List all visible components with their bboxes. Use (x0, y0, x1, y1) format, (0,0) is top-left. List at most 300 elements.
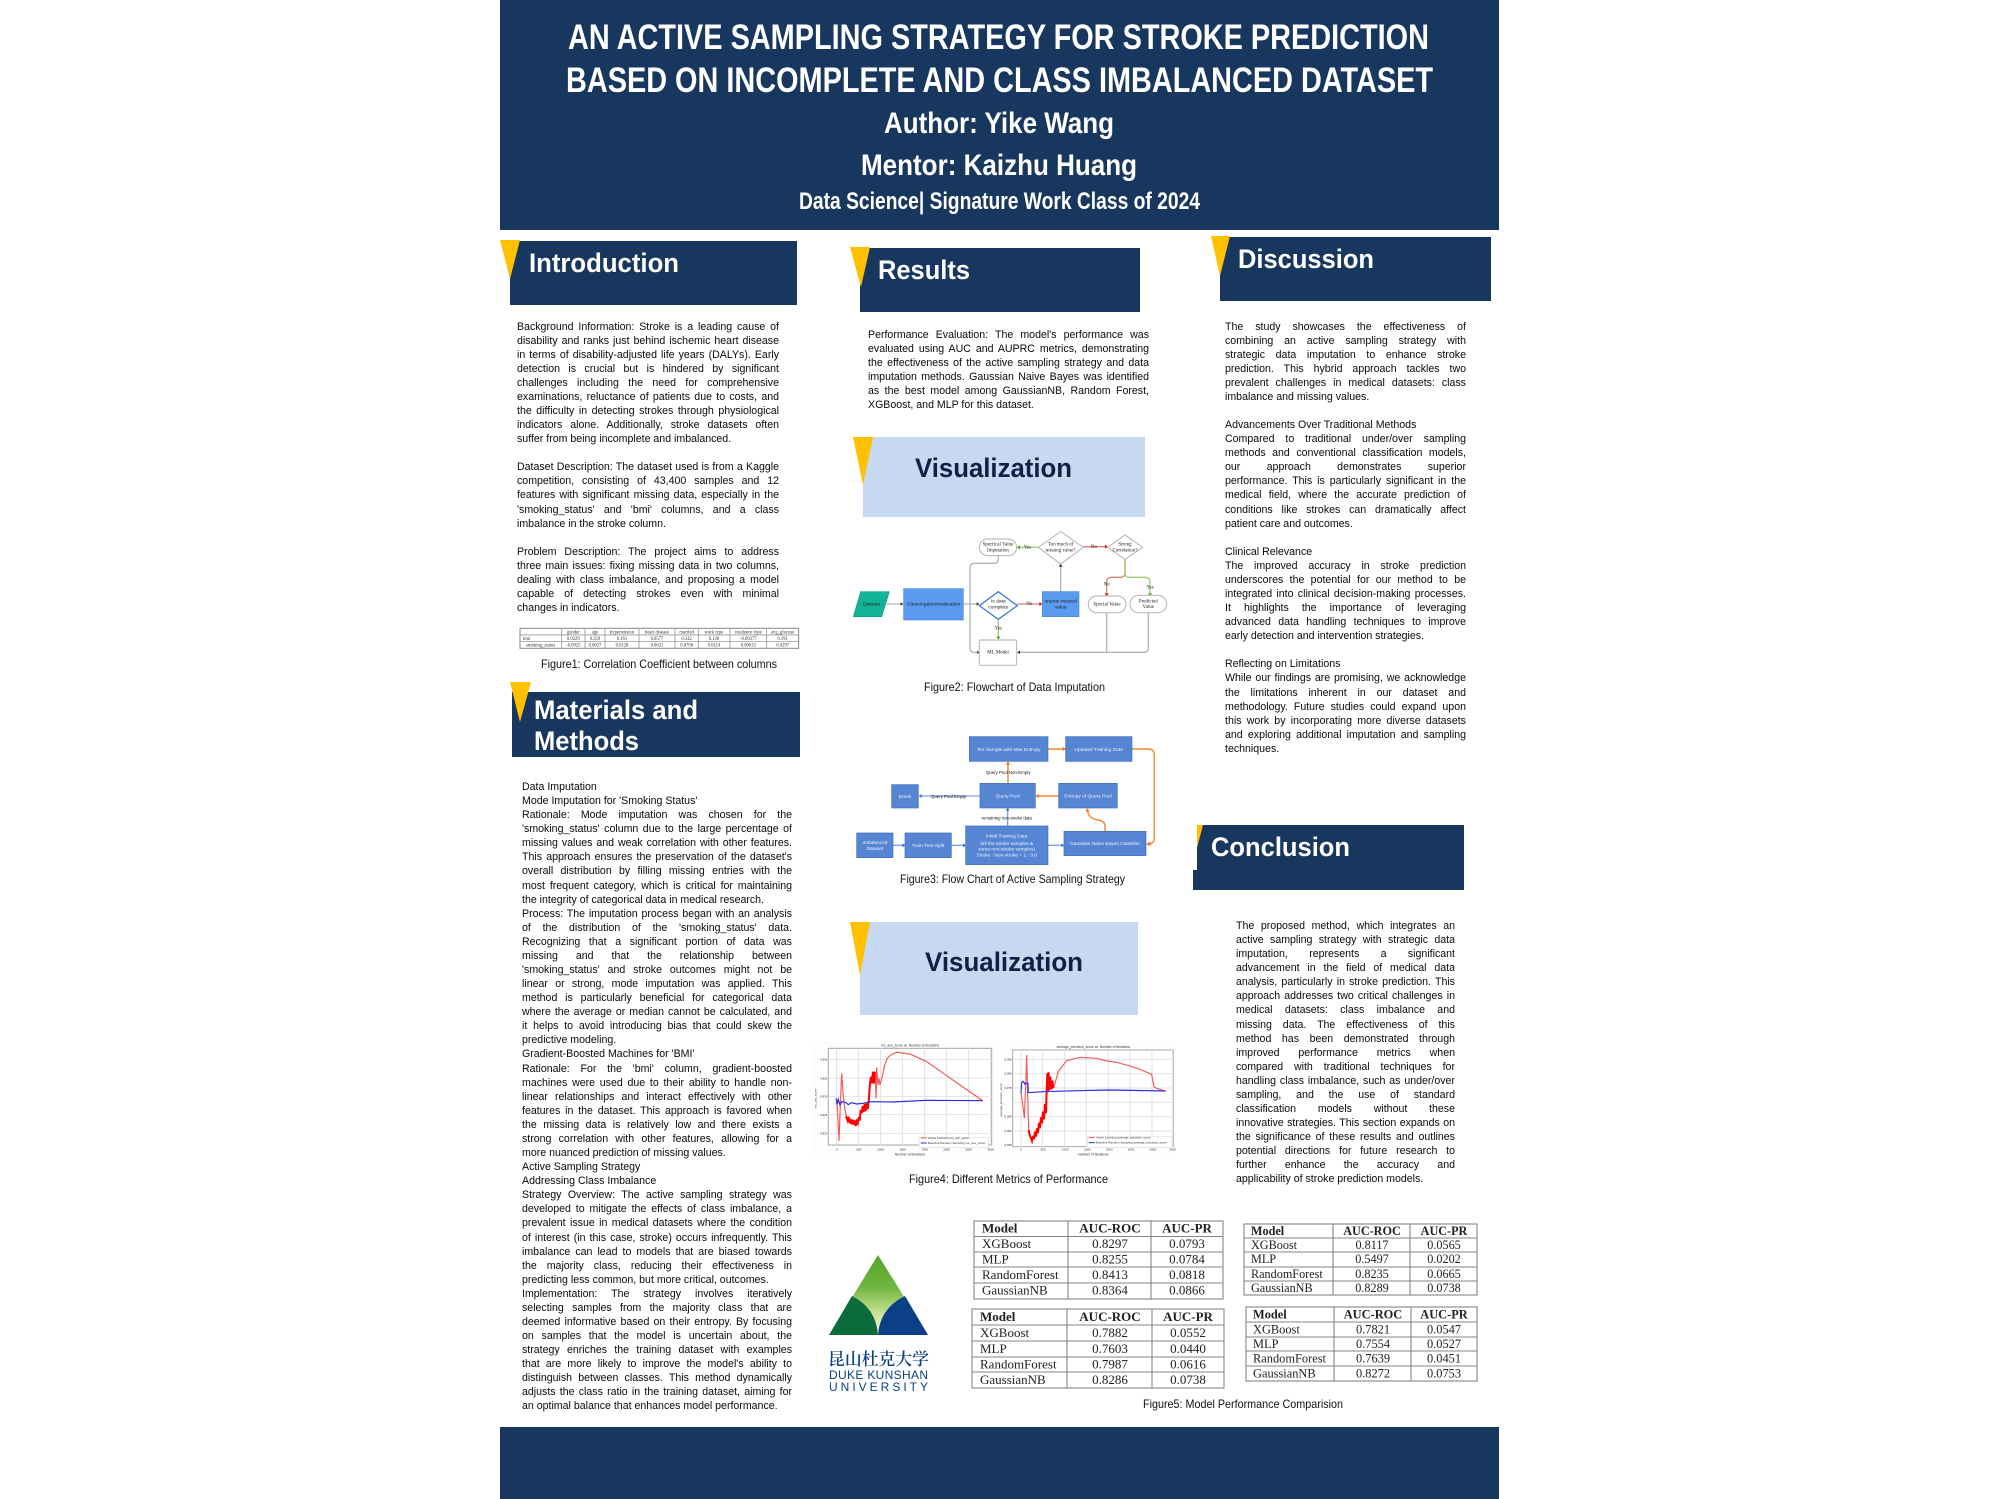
chart: data imputation flowchart: Too much of (1048, 543, 1074, 548)
table: model performance top left: 0.0784 (1169, 1252, 1205, 1266)
text block: discussion: patient care and outcomes. (1225, 518, 1353, 530)
title: BASED ON INCOMPLETE AND CLASS IMBALANCED DATASET (566, 61, 1433, 100)
caption: figure 3: Figure3: Flow Chart of Active Sampling Strategy (900, 873, 1125, 886)
text block: materials and methods (522, 781, 792, 1412)
chart: active sampling flowchart: Entropy of Query Pool (1064, 794, 1112, 800)
chart: data imputation flowchart: Imputation (987, 549, 1009, 554)
table: model performance top right: AUC-PR (1421, 1224, 1468, 1238)
chart: ROC AUC vs iterations: 0.830 (820, 1095, 828, 1099)
heading: Introduction: Introduction (529, 248, 679, 278)
chart: average precision vs iterations (998, 1043, 1177, 1157)
text block: materials and methods: selecting samples from the majority class that are (522, 1302, 792, 1314)
text block: discussion: performance. This is particularly significant in the (1225, 475, 1466, 487)
chart: average precision vs iterations: 0.060 (1004, 1129, 1012, 1133)
text block: results: Performance Evaluation: The model's performance was (868, 329, 1149, 341)
chart: active sampling flowchart: Stroke : Non-stroke = 1 : 0.8 (976, 853, 1037, 859)
table: correlation coefficients: 0.161 (617, 637, 628, 642)
text block: introduction: detection is crucial but is hindered by significant (517, 363, 779, 375)
text block: materials and methods: strong correlation with other features, allowing for a (522, 1133, 792, 1145)
text block: introduction (517, 320, 779, 614)
table: correlation coefficients: residence type (735, 630, 762, 635)
table: correlation coefficients: bmi (523, 637, 531, 642)
table: model performance bottom right: MLP (1253, 1337, 1279, 1351)
table: model performance top left: AUC-PR (1162, 1220, 1213, 1236)
chart: ROC AUC vs iterations: 500 (856, 1147, 862, 1151)
caption: figure 5: Figure5: Model Performance Comparision (1143, 1398, 1343, 1411)
chart: average precision vs iterations: 1000 (1062, 1147, 1069, 1151)
text block: conclusion: sampling, and the use of standard (1236, 1089, 1455, 1101)
text block: materials and methods: of interest (in this case, stroke) occurs infrequently. This (522, 1232, 792, 1244)
text block: conclusion: the significance of these results and outlines (1236, 1131, 1455, 1143)
table: correlation coefficients: gender (567, 630, 580, 635)
logo text: English name: UNIVERSITY (829, 1380, 928, 1394)
table: correlation coefficients: 0.138 (709, 637, 720, 642)
text block: discussion: prediction. This hybrid approach tackles two (1225, 363, 1466, 375)
table: correlation coefficients: 0.0229 (567, 637, 580, 642)
heading: Conclusion (1193, 825, 1464, 890)
text block: discussion: Reflecting on Limitations (1225, 658, 1340, 670)
text block: introduction: indicators alone. Additionally, stroke datasets often (517, 419, 779, 431)
chart: data imputation flowchart: Dataset (863, 602, 881, 608)
table: model performance top right: 0.8235 (1355, 1267, 1389, 1281)
chart: active sampling flowchart: Train-Test-Split (912, 843, 945, 849)
text block: materials and methods: predicting less common, but more critical, outcomes. (522, 1274, 769, 1286)
table: model performance top right: XGBoost (1251, 1238, 1298, 1252)
table: model performance bottom left: 0.7882 (1092, 1325, 1128, 1340)
table: model performance top right: GaussianNB (1251, 1281, 1313, 1295)
logo text: Chinese name: 昆山杜克大学 (828, 1345, 929, 1370)
text block: conclusion: improved performance metrics when (1236, 1047, 1455, 1059)
chart: data imputation flowchart: No (1104, 583, 1110, 588)
table: model performance top right: 0.0565 (1427, 1238, 1461, 1252)
chart: ROC AUC vs iterations: roc_auc_score (814, 1088, 818, 1108)
logo: Duke Kunshan University (828, 1255, 929, 1394)
text block: introduction: 'smoking_status' and 'bmi' columns, and a class (517, 504, 779, 516)
text block: materials and methods: Strategy Overview: The active sampling strategy was (522, 1189, 792, 1201)
text block: results: as the best model among GaussianNB, Random Forest, (868, 385, 1149, 397)
text block: materials and methods: Data Imputation (522, 781, 597, 793)
text block: conclusion: medical datasets: class imbalance and (1236, 1004, 1455, 1016)
chart: average precision vs iterations: 1500 (1084, 1147, 1091, 1151)
chart: ROC AUC vs iterations: roc_auc_score vs. Number of Iterations (881, 1043, 939, 1047)
logo text: English name: DUKE KUNSHAN (829, 1368, 928, 1382)
logo text: English name (829, 1368, 928, 1394)
text block: discussion: The study showcases the effectiveness of (1225, 320, 1466, 332)
text block: discussion: the limitations inherent in our dataset and (1225, 687, 1466, 699)
text block: introduction: disability and ranks just behind ischemic heart disease (517, 335, 779, 347)
text block: introduction: Dataset Description: The dataset used is from a Kaggle (517, 461, 779, 473)
table: model performance bottom right: 0.0547 (1427, 1322, 1461, 1336)
chart: active sampling flowchart: Imbalanced (863, 840, 888, 846)
table: model performance top right (1244, 1224, 1477, 1295)
chart: average precision vs iterations: 500 (1041, 1147, 1046, 1151)
table: correlation coefficients: -0.00377 (740, 637, 757, 642)
table: correlation coefficients (520, 628, 799, 649)
text block: conclusion: handling class imbalance, such as under/over (1236, 1075, 1455, 1087)
heading: Introduction (500, 240, 797, 305)
chart: average precision vs iterations: 0.085 (1004, 1057, 1012, 1061)
heading: Discussion: Discussion (1238, 244, 1374, 274)
chart: data imputation flowchart: Impute missed (1044, 598, 1077, 604)
text block: introduction: Background Information: Stroke is a leading cause of (517, 320, 779, 332)
program line: Data Science| Signature Work Class of 2024 (799, 188, 1201, 215)
text block: materials and methods: Recognizing that a significant portion of data was (522, 936, 792, 948)
table: model performance bottom left: 0.7603 (1092, 1341, 1128, 1356)
table: model performance bottom left: 0.0616 (1170, 1356, 1206, 1372)
chart: ROC AUC vs iterations: 0.820 (820, 1132, 828, 1136)
text block: discussion: medical field, where the accurate prediction of (1225, 489, 1466, 501)
chart: data imputation flowchart: Yes (995, 627, 1002, 632)
text block: results: imputation methods. Gaussian Naive Bayes was identified (868, 371, 1149, 383)
text block: discussion: Clinical Relevance (1225, 546, 1312, 558)
text block: conclusion: advancement in the field of medical data (1236, 962, 1455, 974)
chart: active sampling flowchart: Break (899, 794, 912, 800)
text block: discussion: The improved accuracy in stroke prediction (1225, 560, 1466, 572)
chart: active sampling flowchart: some non-stroke samples) (978, 846, 1035, 852)
text block: materials and methods: features in the dataset. This approach is favored when (522, 1105, 792, 1117)
text block: conclusion: compared with traditional techniques for (1236, 1061, 1455, 1073)
text block: materials and methods: 'smoking_status' column due to the large percentage of (522, 823, 792, 835)
text block: materials and methods: linear or strong, mode imputation was applied. This (522, 978, 792, 990)
heading: Conclusion: Conclusion (1211, 832, 1350, 862)
text block: materials and methods: machines were used due to their ability to handle non- (522, 1077, 792, 1089)
text block: materials and methods: Process: The imputation process began with an analysis (522, 908, 792, 920)
chart: data imputation flowchart: Cleaning&Normalization (907, 602, 961, 608)
table: model performance bottom left: AUC-ROC (1079, 1309, 1141, 1324)
table: model performance top left: GaussianNB (982, 1282, 1048, 1298)
text block: discussion: imbalance and missing values. (1225, 391, 1369, 403)
chart: ROC AUC vs iterations: Number of Iterations (895, 1152, 925, 1156)
chart: data imputation flowchart: Special Value (1093, 602, 1121, 607)
chart: ROC AUC vs iterations: 1000 (877, 1147, 884, 1151)
chart: ROC AUC vs iterations: 0 (836, 1147, 838, 1151)
mentor: Mentor: Kaizhu Huang (861, 149, 1137, 182)
chart: ROC AUC vs iterations: 3000 (965, 1147, 972, 1151)
chart: data imputation flowchart (853, 532, 1167, 665)
icon: mountain mark (829, 1255, 928, 1335)
text block: conclusion (1236, 920, 1455, 1185)
table: model performance top left: Model (982, 1220, 1018, 1236)
chart: ROC AUC vs iterations (812, 1042, 995, 1158)
text block: materials and methods: prevalent issue in medical datasets where the condition (522, 1217, 792, 1229)
chart: ROC AUC vs iterations: 2000 (921, 1147, 928, 1151)
chart: average precision vs iterations: average_precision_score (999, 1083, 1003, 1117)
chart: ROC AUC vs iterations: Baseline Random Sampling roc_auc_score (928, 1141, 986, 1145)
table: model performance bottom right: 0.7821 (1356, 1322, 1390, 1336)
text block: results: XGBoost, and MLP for this dataset. (868, 399, 1034, 411)
text block: discussion: prevalent challenges in medical datasets: class (1225, 377, 1466, 389)
table: correlation coefficients: work type (705, 630, 723, 635)
table: model performance bottom left: XGBoost (980, 1325, 1030, 1340)
chart: active sampling flowchart: (all the stroke samples & (980, 841, 1034, 847)
text block: discussion: methodology. Future studies could expand upon (1225, 701, 1466, 713)
chart: active sampling flowchart: Updated Training Data (1074, 747, 1123, 753)
chart: data imputation flowchart: Predicted (1139, 599, 1158, 604)
table: model performance bottom right: AUC-ROC (1344, 1308, 1402, 1322)
text block: discussion: Advancements Over Traditional Methods (1225, 419, 1416, 431)
text block: materials and methods: most frequent category, which is critical for maintaining (522, 880, 792, 892)
text block: results (868, 329, 1149, 411)
table: model performance top right: 0.0202 (1427, 1252, 1461, 1266)
chart: average precision vs iterations: Active Learning average_precision_score (1096, 1136, 1151, 1140)
text block: discussion: underscores the potential for our method to be (1225, 574, 1466, 586)
table: correlation coefficients: smoking_status (526, 644, 555, 649)
text block: discussion: early detection and intervention strategies. (1225, 630, 1424, 642)
table: model performance bottom left: 0.0440 (1170, 1341, 1206, 1356)
text block: discussion: and exploring additional imputation and sampling (1225, 729, 1466, 741)
table: correlation coefficients: 0.342 (681, 637, 693, 642)
text block: results: the effectiveness of the active sampling strategy and data (868, 357, 1149, 369)
chart: data imputation flowchart: complete (988, 605, 1009, 611)
heading: Visualization two (850, 922, 1138, 1015)
text block: conclusion: potential directions for future research to (1236, 1145, 1455, 1157)
chart: active sampling flowchart: Query Pool Non-Empty (986, 770, 1031, 775)
chart: average precision vs iterations: 3500 (1169, 1147, 1176, 1151)
chart: ROC AUC vs iterations: Active Learning roc_auc_score (928, 1136, 969, 1140)
text block: materials and methods: the majority class, reducing their effectiveness in (522, 1260, 792, 1272)
text block: materials and methods: imbalance can lead to models that are biased towards (522, 1246, 792, 1258)
text block: discussion: techniques. (1225, 743, 1279, 755)
heading: Visualization two: Visualization (925, 947, 1083, 977)
table: model performance top left: RandomForest (982, 1267, 1059, 1282)
text block: conclusion: innovative strategies. This section expands on (1236, 1117, 1455, 1129)
text block: conclusion: classification models without these (1236, 1103, 1455, 1115)
text block: materials and methods: more nuanced prediction of missing values. (522, 1147, 726, 1159)
text block: discussion: integrated into clinical decision-making processes. (1225, 588, 1466, 600)
text block: materials and methods: adjusts the class ratio in the training dataset, aiming for (522, 1386, 792, 1398)
table: correlation coefficients: 0.00633 (741, 644, 757, 649)
text block: discussion: combining an active sampling strategy with (1225, 335, 1466, 347)
text block: materials and methods: linear relationships and interact effectively with other (522, 1091, 792, 1103)
table: model performance bottom right: GaussianNB (1253, 1366, 1316, 1380)
caption: figure 2: Figure2: Flowchart of Data Imputation (924, 681, 1105, 694)
text block: introduction: features with significant missing data, especially in the (517, 489, 779, 501)
table: model performance top left: 0.8255 (1092, 1252, 1128, 1266)
text block: materials and methods: predictive modeling. (522, 1034, 616, 1046)
chart: data imputation flowchart: Yes (1146, 585, 1154, 590)
table: model performance top left: XGBoost (982, 1236, 1032, 1251)
text block: materials and methods: 'smoking_status' and stroke outcomes might not be (522, 964, 792, 976)
text block: introduction: Problem Description: The project aims to address (517, 546, 779, 558)
chart: average precision vs iterations: average_precision_score vs. Number of Iterations (1057, 1045, 1130, 1049)
table: model performance bottom right: 0.0451 (1427, 1352, 1461, 1366)
table: model performance top right: MLP (1251, 1252, 1276, 1266)
table: correlation coefficients: -0.0925 (566, 644, 581, 649)
caption: figure 4: Figure4: Different Metrics of Performance (909, 1173, 1108, 1186)
text block: materials and methods: method is particularly beneficial for categorical data (522, 992, 792, 1004)
table: model performance bottom right: XGBoost (1253, 1322, 1300, 1336)
text block: materials and methods: developed to mitigate the effects of class imbalance, a (522, 1203, 792, 1215)
table: model performance bottom right: Model (1253, 1308, 1287, 1322)
text block: materials and methods: distinguish between classes. This method dynamically (522, 1372, 792, 1384)
caption: figure 1: Figure1: Correlation Coefficient between columns (541, 658, 777, 671)
table: correlation coefficients: 0.0631 (651, 644, 664, 649)
table: model performance bottom right: RandomForest (1253, 1352, 1327, 1366)
text block: materials and methods: Rationale: For the 'bmi' column, gradient-boosted (522, 1063, 792, 1075)
text block: discussion: strategic data imputation to enhance stroke (1225, 349, 1466, 361)
heading: Materials and Methods: Materials and (534, 695, 698, 725)
text block: materials and methods: on samples that the model is uncertain about, the (522, 1330, 792, 1342)
table: model performance top right: AUC-ROC (1343, 1224, 1401, 1238)
chart: ROC AUC vs iterations: 0.840 (820, 1058, 828, 1062)
table: model performance bottom right: 0.8272 (1356, 1366, 1390, 1380)
table: model performance top left: 0.0818 (1169, 1267, 1205, 1282)
table: model performance bottom right: AUC-PR (1420, 1308, 1469, 1322)
chart: active sampling flowchart (857, 737, 1154, 865)
text block: materials and methods: Rationale: Mode imputation was chosen for the (522, 809, 792, 821)
chart: active sampling flowchart: remaining non-stroke data (982, 815, 1032, 820)
chart: average precision vs iterations: Number of Iterations (1078, 1152, 1109, 1156)
table: model performance bottom left: 0.8286 (1092, 1372, 1128, 1387)
table: model performance top left: 0.0793 (1169, 1236, 1205, 1251)
table: model performance top right: 0.8117 (1355, 1238, 1389, 1252)
text block: discussion (1225, 320, 1466, 755)
table: model performance bottom right: 0.0527 (1427, 1337, 1461, 1351)
title: AN ACTIVE SAMPLING STRATEGY FOR STROKE PREDICTION (568, 18, 1429, 57)
text block: introduction: challenges including the need for comprehensive (517, 377, 779, 389)
text block: introduction: capable of detecting strokes even with minimal (517, 588, 779, 600)
text block: conclusion: active sampling strategy with strategic data (1236, 934, 1455, 946)
table: model performance top left: 0.8413 (1092, 1267, 1128, 1282)
chart: data imputation flowchart: Value (1143, 605, 1155, 610)
table: model performance bottom left (972, 1309, 1224, 1388)
table: model performance bottom right: 0.7639 (1356, 1352, 1390, 1366)
table: model performance top left (974, 1220, 1223, 1299)
heading: Materials and Methods (510, 682, 800, 757)
table: correlation coefficients: 0.0706 (680, 644, 694, 649)
table: model performance bottom left: RandomForest (980, 1356, 1057, 1372)
table: model performance bottom left: AUC-PR (1163, 1309, 1214, 1324)
table: model performance bottom left: 0.7987 (1092, 1356, 1128, 1372)
chart: average precision vs iterations: 2500 (1128, 1147, 1135, 1151)
chart: data imputation flowchart: Strong (1118, 543, 1132, 548)
text block: conclusion: analysis, particularly in stroke prediction. This (1236, 976, 1455, 988)
text block: materials and methods: Implementation: The strategy involves iteratively (522, 1288, 792, 1300)
table: model performance bottom right: 0.0753 (1427, 1366, 1461, 1380)
text block: introduction: examinations, reluctance of patients due to costs, and (517, 391, 779, 403)
text block: materials and methods: an optimal balance that enhances model performance. (522, 1400, 778, 1412)
table: correlation coefficients: avg_glucose (771, 630, 794, 635)
table: correlation coefficients: 0.0297 (776, 644, 790, 649)
text block: materials and methods: overall distribution by filling missing entries with the (522, 865, 792, 877)
table: model performance top left: 0.8297 (1092, 1236, 1128, 1251)
text block: introduction: the difficulty in detecting strokes through physiological (517, 405, 779, 417)
text block: conclusion: approach addresses two critical challenges in (1236, 990, 1455, 1002)
chart: active sampling flowchart: Query Pool Empty (931, 794, 967, 799)
table: model performance top right: 0.0738 (1427, 1281, 1461, 1295)
text block: discussion: While our findings are promising, we acknowledge (1225, 672, 1466, 684)
table: correlation coefficients: 0.359 (590, 637, 601, 642)
chart: ROC AUC vs iterations: 0.835 (820, 1076, 828, 1080)
chart: active sampling flowchart: Dataset (867, 846, 884, 852)
table: correlation coefficients: 0.0128 (616, 644, 629, 649)
chart: average precision vs iterations: 0.075 (1004, 1086, 1012, 1090)
author: Author: Yike Wang (884, 107, 1114, 140)
text block: introduction: in terms of disability-adjusted life years (DALYs). Early (517, 349, 779, 361)
chart: ROC AUC vs iterations: 1500 (899, 1147, 906, 1151)
text block: discussion: methods and conventional classification models, (1225, 447, 1466, 459)
chart: data imputation flowchart: missing value? (1046, 549, 1076, 554)
text block: materials and methods: Addressing Class Imbalance (522, 1175, 656, 1187)
text block: introduction: imbalance in the stroke column. (517, 518, 666, 530)
heading: Visualization one: Visualization (915, 453, 1072, 483)
heading: Results (850, 247, 1140, 312)
chart: active sampling flowchart: Ten Sample with Max Entropy (977, 747, 1041, 753)
text block: discussion: our approach demonstrates superior (1225, 461, 1466, 473)
table: correlation coefficients: married (679, 630, 695, 635)
chart: data imputation flowchart: Spectical Value (983, 543, 1014, 548)
chart: average precision vs iterations: 0 (1020, 1147, 1022, 1151)
text block: conclusion: imputation, represents a significant (1236, 948, 1455, 960)
table: model performance top right: Model (1251, 1224, 1285, 1238)
text block: conclusion: The proposed method, which integrates an (1236, 920, 1455, 932)
chart: average precision vs iterations: 0.055 (1004, 1143, 1012, 1147)
chart: average precision vs iterations: 0.080 (1004, 1072, 1012, 1076)
table: correlation coefficients: 0.0627 (589, 644, 602, 649)
text block: materials and methods: of the distribution of the 'smoking_status' data. (522, 922, 792, 934)
chart: ROC AUC vs iterations: 0.825 (820, 1113, 828, 1117)
text block: conclusion: missing data. The effectiveness of this (1236, 1019, 1455, 1031)
text block: conclusion: method has been demonstrated through (1236, 1033, 1455, 1045)
chart: active sampling flowchart: Initial Training Data (986, 834, 1028, 840)
text block: materials and methods: deemed informative based on their entropy. By focusing (522, 1316, 792, 1328)
table: model performance bottom left: MLP (980, 1341, 1007, 1356)
table: model performance top left: MLP (982, 1252, 1009, 1266)
table: correlation coefficients: 0.191 (777, 637, 789, 642)
text block: materials and methods: missing and that the relationship between (522, 950, 792, 962)
text block: introduction: dealing with class imbalance, and proposing a model (517, 574, 779, 586)
text block: introduction: suffer from being incomplete and imbalanced. (517, 433, 731, 445)
text block: introduction: competition, consisting of 43,400 samples and 12 (517, 475, 779, 487)
chart: active sampling flowchart: Gaussian Naive Bayes Classifier (1070, 841, 1140, 847)
table: correlation coefficients: 0.0114 (708, 644, 721, 649)
table: model performance top left: 0.0866 (1169, 1282, 1205, 1298)
table: model performance bottom right (1246, 1307, 1477, 1381)
text block: introduction: changes in indicators. (517, 602, 619, 614)
text block: materials and methods: Mode Imputation for 'Smoking Status' (522, 795, 697, 807)
chart: ROC AUC vs iterations: 2500 (943, 1147, 950, 1151)
text block: materials and methods: This approach ensures the preservation of the dataset's (522, 851, 792, 863)
table: correlation coefficients: hypertension (610, 630, 635, 635)
text block: discussion: Compared to traditional under/over sampling (1225, 433, 1466, 445)
text block: introduction: three main issues: fixing missing data in two columns, (517, 560, 779, 572)
table: model performance top right: 0.8289 (1355, 1281, 1389, 1295)
table: correlation coefficients: age (592, 630, 598, 635)
text block: materials and methods: Active Sampling Strategy (522, 1161, 640, 1173)
table: model performance top right: 0.5497 (1355, 1252, 1389, 1266)
table: model performance bottom right: 0.7554 (1356, 1337, 1390, 1351)
text block: discussion: advanced data handling techniques to improve (1225, 616, 1466, 628)
table: model performance top right: RandomForest (1251, 1267, 1323, 1281)
table: model performance bottom left: 0.0738 (1170, 1372, 1206, 1387)
text block: materials and methods: that are more likely to improve the model's ability to (522, 1358, 792, 1370)
text block: materials and methods: it helps to avoid introducing bias that could skew the (522, 1020, 792, 1032)
footer bar (500, 1427, 1499, 1499)
chart: ROC AUC vs iterations: 3500 (987, 1147, 994, 1151)
table: model performance bottom left: 0.0552 (1170, 1325, 1206, 1340)
heading: Visualization one (853, 437, 1145, 517)
chart: data imputation flowchart: Correlation? (1113, 549, 1138, 554)
chart: data imputation flowchart: ML Model (987, 651, 1009, 656)
text block: materials and methods: Gradient-Boosted Machines for 'BMI' (522, 1048, 694, 1060)
panel: poster header (500, 0, 1499, 230)
text block: conclusion: applicability of stroke prediction models. (1236, 1173, 1423, 1185)
chart: average precision vs iterations: Baseline Random Sampling average_precision_score (1096, 1141, 1167, 1145)
chart: data imputation flowchart: No (1026, 602, 1033, 607)
chart: average precision vs iterations: 2000 (1106, 1147, 1113, 1151)
table: model performance top right: 0.0665 (1427, 1267, 1461, 1281)
text block: materials and methods: missing values and weak correlation with other features. (522, 837, 792, 849)
